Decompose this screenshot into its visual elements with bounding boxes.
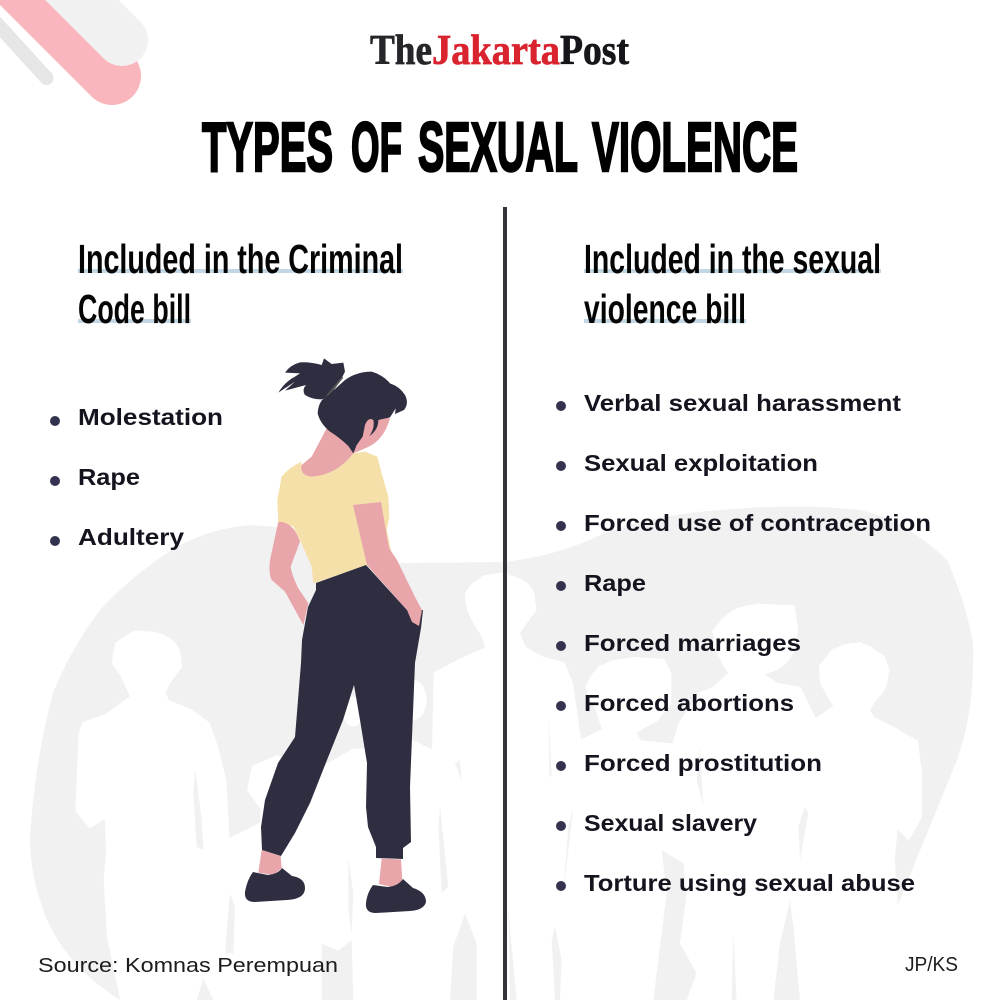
logo — [370, 28, 629, 74]
credit: JP/KS — [905, 953, 958, 976]
list: sexual violence bill: Rape — [584, 570, 646, 596]
list: sexual violence bill: Forced abortions — [584, 690, 794, 716]
logo: Jakarta — [432, 28, 560, 74]
list: criminal code bill: Rape — [78, 464, 140, 490]
heading: sexual violence bill: Included in the sexual — [584, 236, 881, 282]
source note: Source: Komnas Perempuan — [38, 954, 338, 977]
illustration: woman from behind — [245, 358, 426, 913]
list: sexual violence bill: Torture using sexual abuse — [584, 870, 915, 896]
title: TYPES — [202, 108, 333, 186]
list: criminal code bill — [50, 404, 223, 550]
decorative corner bars — [0, 0, 122, 78]
heading: sexual violence bill — [584, 236, 881, 332]
title: VIOLENCE — [592, 108, 798, 186]
list: sexual violence bill: Sexual exploitation — [584, 450, 818, 476]
title: SEXUAL — [418, 108, 578, 186]
logo: The — [370, 28, 432, 74]
heading: criminal code bill — [78, 236, 403, 332]
list: criminal code bill: Adultery — [78, 524, 184, 550]
heading: criminal code bill: Included in the Criminal — [78, 236, 403, 282]
center divider — [503, 207, 507, 1000]
heading: criminal code bill: Code bill — [78, 286, 191, 332]
list: sexual violence bill: Sexual slavery — [584, 810, 757, 836]
title — [202, 108, 798, 186]
list: sexual violence bill — [556, 390, 931, 896]
background silhouette crowd — [30, 506, 1000, 1000]
heading: sexual violence bill: violence bill — [584, 286, 746, 332]
title: OF — [351, 108, 402, 186]
logo: Post — [560, 28, 629, 74]
list: criminal code bill: Molestation — [78, 404, 223, 430]
list: sexual violence bill: Forced marriages — [584, 630, 801, 656]
list: sexual violence bill: Verbal sexual harassment — [584, 390, 901, 416]
list: sexual violence bill: Forced prostitution — [584, 750, 822, 776]
list: sexual violence bill: Forced use of contraception — [584, 510, 931, 536]
